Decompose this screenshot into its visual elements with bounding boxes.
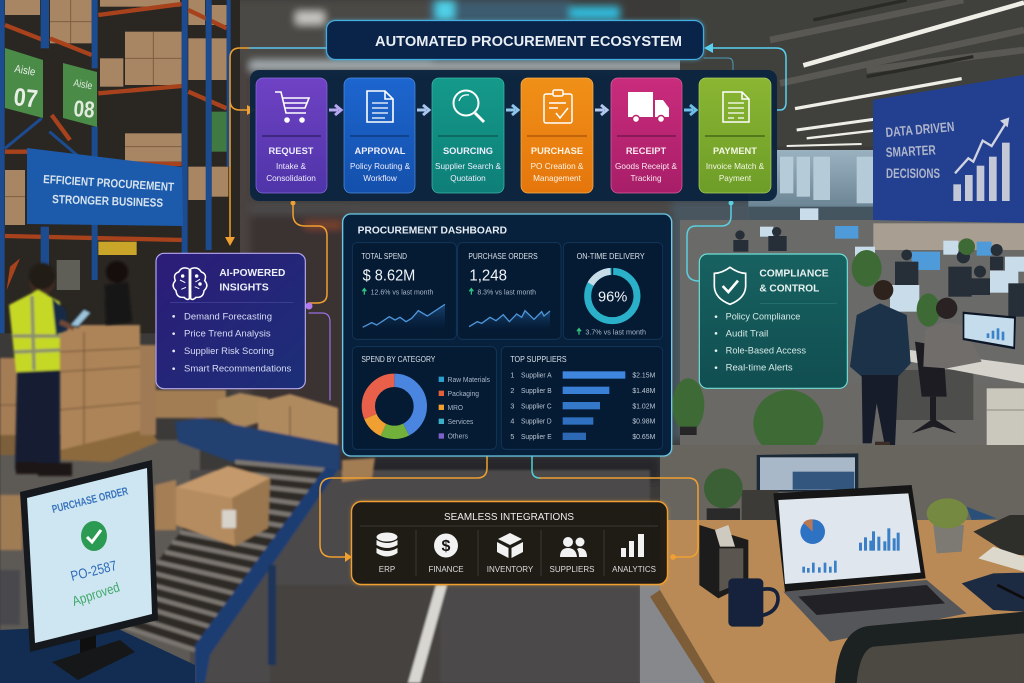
floor behind desk [660,445,1024,520]
icon: clipboard [544,90,572,123]
chair [915,342,947,397]
windows [748,150,873,227]
panel: compliance and control [699,254,847,388]
desk plant [933,525,964,553]
aisle sign 08: Aisle [72,77,93,92]
card: payment [699,78,771,193]
chart: top suppliers: Supplier B [521,387,552,395]
second worker [106,261,128,283]
card: sourcing [432,78,504,193]
card: payment: PAYMENT [713,146,757,156]
chart: top suppliers: Supplier E [521,433,552,441]
panel: seamless integrations [351,501,668,585]
card: approval: Policy Routing & [350,162,411,171]
far people [733,227,1024,317]
legend: Others [448,433,468,441]
card: sourcing: Supplier Search & [435,162,502,171]
ceiling lights [787,3,1024,146]
blue rack uprights [0,0,231,333]
card: purchase: PURCHASE [531,146,583,156]
icon: invoice [723,92,749,122]
panel: process flow [250,70,777,201]
orange rack beams [5,4,227,240]
card: sourcing: SOURCING [443,146,493,156]
icon: rising bar chart [953,117,1010,201]
office banner: data driven [873,75,1024,223]
panel: AI-powered insights [156,253,305,389]
ring gauge [588,267,637,321]
icon: approved check [81,521,107,551]
notebooks [973,515,1024,555]
office banner: data driven: SMARTER [885,142,936,160]
list: compliance features: Real-time Alerts [726,363,793,373]
card: request: Intake & [276,162,307,171]
metric: total spend: TOTAL SPEND [361,251,407,261]
card: request: Consolidation [266,174,316,183]
chart: top suppliers: $0.98M [632,418,655,426]
donut [368,380,420,432]
chart: top suppliers: Supplier A [521,371,552,379]
icon: shield with check [714,267,746,304]
card: purchase [521,78,593,193]
card: request: REQUEST [269,146,314,156]
list: compliance features: Policy Compliance [726,312,800,322]
panel: AI-powered insights: AI-POWERED [219,268,286,279]
metric: on-time delivery: 3.7% vs last month [585,328,646,337]
chart: top suppliers [501,347,663,449]
icon: shopping cart [275,92,309,122]
metric: purchase orders: 8.3% vs last month [477,288,536,297]
purchase order monitor [0,460,195,683]
card: payment: Payment [719,174,752,183]
metric: purchase orders: 1,248 [469,268,507,285]
laptop on desk [773,485,967,642]
chart: top suppliers: $2.15M [632,372,655,380]
icon: finance dollar: $ [442,538,451,555]
worker with tablet [9,261,132,476]
list: compliance features [715,312,807,373]
list: AI features: Price Trend Analysis [184,329,271,339]
carton boxes [217,393,268,428]
chart monitor [963,312,1016,349]
worker pallet boxes [0,358,62,453]
panel: AI-powered insights: INSIGHTS [219,283,269,294]
list: compliance features: Audit Trail [726,328,768,338]
legend: Packaging [448,390,479,398]
distant blurred backdrop [232,0,777,480]
icon: suppliers people [550,537,594,574]
pen holder [699,525,748,598]
warehouse banner [27,148,183,226]
metric: purchase orders [458,243,561,339]
office banner: data driven: DECISIONS [886,166,940,181]
list: AI features: Supplier Risk Scoring [184,346,274,356]
seated worker [936,298,957,319]
icon: inventory cube: INVENTORY [487,565,534,574]
aisle sign 07: 07 [12,83,39,113]
card: payment: Invoice Match & [706,162,765,171]
metric: on-time delivery [563,243,663,339]
chart: top suppliers: $0.65M [632,433,655,441]
sparkline [363,304,445,332]
panel: procurement dashboard [343,214,672,456]
purchase order monitor: PO-2587 [69,557,118,584]
box on conveyor [176,466,270,546]
small plant behind desk [704,468,743,508]
icon: suppliers people: SUPPLIERS [550,565,594,574]
metric: on-time delivery: 96% [598,289,627,305]
card: purchase: Management [533,174,582,183]
list: AI features: Demand Forecasting [184,311,272,321]
warehouse banner: STRONGER BUSINESS [52,192,163,210]
title bar [326,20,704,60]
card: receipt: RECEIPT [626,146,666,156]
metric: purchase orders: PURCHASE ORDERS [468,251,538,261]
panel: compliance and control: & CONTROL [759,284,820,295]
icon: analytics bars: ANALYTICS [612,565,656,574]
card: purchase: PO Creation & [531,162,584,171]
aisle sign 07: Aisle [13,63,36,79]
legend [439,376,490,441]
connector: AI insights to request [290,200,330,400]
coffee mug [728,578,763,627]
blue conveyor frame top [175,418,340,470]
legend: Services [448,418,474,426]
chart: top suppliers: TOP SUPPLIERS [510,354,567,364]
panel: compliance and control: COMPLIANCE [759,269,829,280]
metric: total spend [352,243,456,339]
list: AI features [172,311,292,374]
connector: title to AI insights and request [225,48,326,246]
connector: dashboard to integrations left [320,456,487,562]
chart: top suppliers: 4 [510,418,514,426]
icon: ERP database: ERP [379,565,395,574]
desk top [640,585,713,683]
heading: PROCUREMENT DASHBOARD [358,226,508,237]
aisle sign 07 [5,48,43,118]
panel: seamless integrations: SEAMLESS INTEGRATIONS [444,512,574,523]
aisle sign 08: 08 [73,95,96,123]
icon: finance dollar: FINANCE [428,565,464,574]
white desk [910,350,1024,383]
icon: inventory cube [487,533,534,574]
legend: MRO [448,404,463,412]
rack boxes [5,0,228,225]
chart: top suppliers: Supplier D [521,418,552,426]
list: AI features: Smart Recommendations [184,364,292,374]
card: receipt: Tracking [630,174,662,183]
list: compliance features: Role-Based Access [726,346,807,356]
aisle floor line [408,585,447,683]
legend: Raw Materials [448,376,490,384]
chart: top suppliers: $1.02M [632,402,655,410]
metric: total spend: 12.6% vs last month [371,288,433,297]
sparkline [469,311,550,332]
card: approval: Workflow [363,174,397,183]
rollers [110,462,325,650]
icon: magnifier [454,90,484,122]
metric: total spend: $ 8.62M [363,268,415,285]
connector: payment to compliance [687,200,734,281]
chart: top suppliers: $1.48M [632,387,655,395]
chart: top suppliers: 3 [510,402,514,410]
connector: dashboard to integrations right [532,456,698,560]
card: receipt [611,78,682,193]
process arrows [329,105,696,115]
chart: top suppliers: Supplier C [521,402,552,410]
chart: top suppliers: 2 [510,387,514,395]
connector lines [225,43,786,562]
warehouse racks [0,0,240,333]
blue conveyor rail [195,468,338,662]
side cabinet [893,370,973,420]
chart: spend by category: SPEND BY CATEGORY [361,354,436,364]
connector: payment to title [704,43,786,110]
icon: ERP database [376,532,398,574]
card: approval: APPROVAL [355,146,406,156]
chart: top suppliers: 1 [510,371,514,379]
icon: document [367,91,393,122]
warehouse banner: EFFICIENT PROCUREMENT [43,172,175,194]
ceiling [680,0,1024,147]
title bar: AUTOMATED PROCUREMENT ECOSYSTEM [375,34,682,50]
plants in office [672,238,975,457]
icon: brain [173,268,207,299]
aisle sign 08 [63,63,97,127]
green side sign [212,112,227,152]
office banner: data driven: DATA DRIVEN [885,119,955,140]
icon: analytics bars [612,534,656,574]
foreground chair [835,612,1024,683]
card: sourcing: Quotation [450,174,486,183]
chart: top suppliers: 5 [510,433,514,441]
ceiling and office [672,0,1024,523]
icon: finance dollar [428,534,464,574]
purchase order monitor: Approved [70,579,122,609]
card: request [256,78,327,193]
card: receipt: Goods Receipt & [615,162,677,171]
warehouse floor, conveyor and boxes [0,325,650,683]
chart: spend by category [352,347,496,449]
office backdrop [680,220,1024,433]
wooden desk foreground [640,445,1024,683]
card: approval [344,78,415,193]
far monitors [760,208,1024,312]
metric: on-time delivery: ON-TIME DELIVERY [577,251,645,261]
purchase order monitor: PURCHASE ORDER [51,485,129,516]
walking man [873,280,893,300]
back laptop [757,453,858,492]
icon: truck [628,92,669,122]
